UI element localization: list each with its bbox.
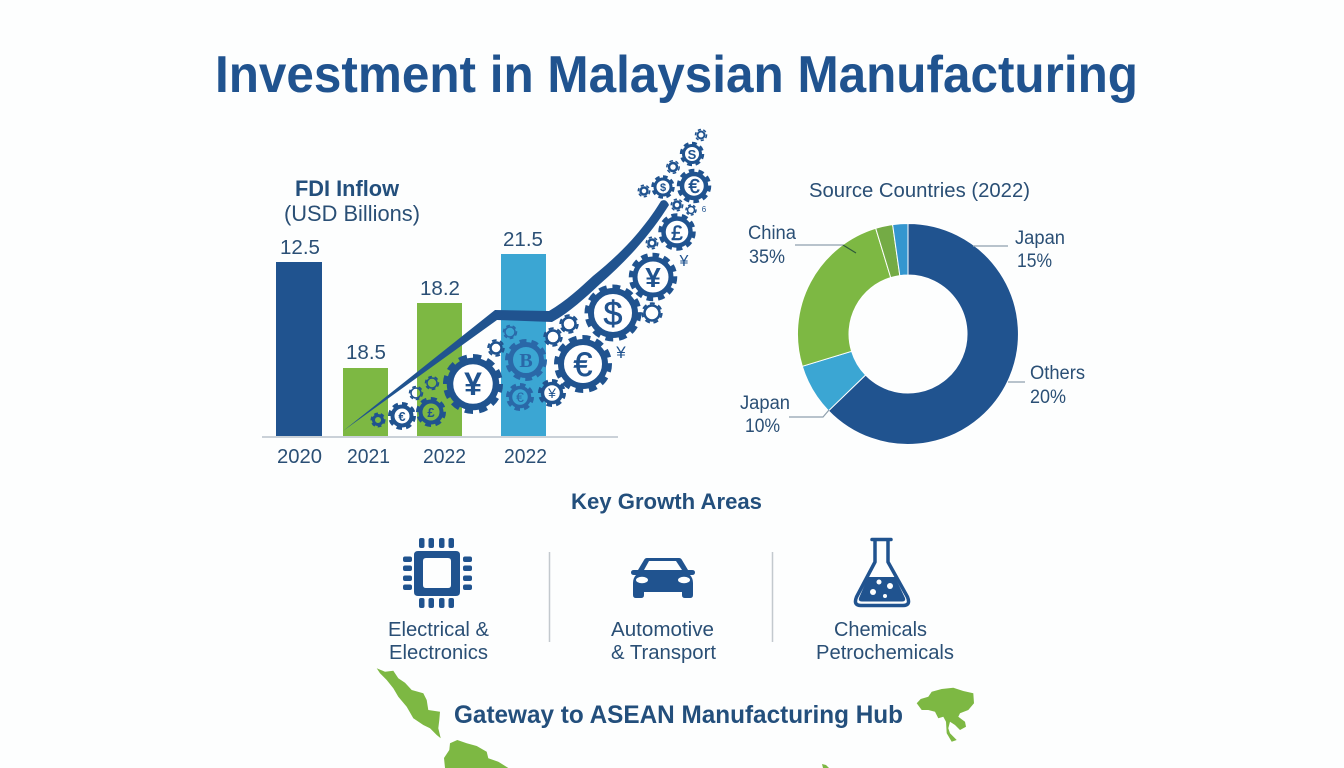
gear: pound upper — [660, 215, 694, 249]
bar values: 18.2 — [420, 278, 460, 300]
map: southern specks — [822, 764, 829, 768]
chart heading: (USD Billions) — [284, 201, 420, 226]
bar values — [280, 229, 543, 364]
gear: B — [507, 341, 545, 379]
chart heading: FDI Inflow — [295, 176, 400, 201]
divider right — [772, 552, 774, 642]
loose yen signs: 6 — [702, 205, 707, 214]
year labels: 2020 — [277, 446, 322, 468]
title: Investment in Malaysian Manufacturing — [215, 46, 1138, 104]
bar values: 21.5 — [503, 229, 543, 251]
donut labels: 20% — [1030, 387, 1066, 408]
label: electrical and electronics — [388, 619, 490, 664]
icon: car — [631, 558, 695, 598]
gear: yen upper — [631, 255, 675, 299]
year labels: 2022 — [423, 446, 466, 468]
gear: yen upper: ¥ — [645, 262, 661, 293]
donut labels: Japan — [1015, 228, 1065, 249]
panel: FDI inflow bar chart — [262, 176, 618, 468]
donut labels: Others — [1030, 363, 1085, 384]
donut heading: Source Countries (2022) — [809, 180, 1030, 202]
map: peninsula — [444, 740, 508, 768]
gear: dollar large: $ — [604, 295, 623, 333]
label: automotive and transport — [611, 619, 716, 664]
gear: dollar large — [587, 287, 639, 339]
gear: euro large — [556, 338, 610, 390]
icon: microchip — [403, 538, 472, 608]
gear: pound upper: £ — [671, 222, 683, 245]
gear: euro upper: € — [688, 176, 700, 198]
panel: source countries donut chart — [740, 180, 1085, 444]
gear: euro small in bar — [508, 384, 532, 410]
donut labels: China — [748, 223, 796, 244]
divider left — [548, 552, 550, 642]
label: chemicals and petrochemicals: Petrochemicals — [816, 642, 954, 664]
label: chemicals and petrochemicals: Chemicals — [834, 619, 927, 641]
year labels — [277, 446, 547, 468]
loose yen signs — [615, 205, 707, 362]
small cogs — [372, 130, 706, 426]
year labels: 2021 — [347, 446, 390, 468]
gear: yen small — [540, 380, 564, 406]
gear: dollar upper — [652, 176, 674, 198]
donut labels: 35% — [749, 247, 785, 268]
bar values: 18.5 — [346, 342, 386, 364]
gear: yen small: ¥ — [547, 385, 556, 401]
leader lines — [789, 245, 1025, 417]
gear: pound — [418, 398, 444, 426]
year labels: 2022 — [504, 446, 547, 468]
growth arrow curve — [343, 200, 669, 431]
loose yen signs: ¥ — [615, 343, 626, 362]
gear: euro low — [390, 404, 414, 428]
panel: key growth areas — [388, 489, 954, 664]
gear: dollar upper: $ — [660, 182, 666, 194]
label: chemicals and petrochemicals — [816, 619, 954, 664]
map of ASEAN region — [377, 668, 974, 768]
gear: euro low: € — [398, 409, 406, 424]
donut labels: 10% — [745, 416, 780, 437]
gear: euro upper — [678, 170, 710, 202]
label: automotive and transport: & Transport — [611, 642, 716, 664]
map: eastern island — [917, 688, 974, 742]
donut labels: 15% — [1017, 251, 1052, 272]
label: automotive and transport: Automotive — [611, 619, 714, 641]
loose yen signs: ¥ — [679, 253, 689, 270]
gear: S top: S — [688, 147, 697, 162]
bar values: 12.5 — [280, 237, 320, 259]
donut labels — [740, 223, 1085, 437]
map: Sumatra — [377, 668, 441, 738]
donut segments — [797, 224, 1018, 444]
gears of currency — [372, 130, 710, 428]
gear: yen large — [446, 356, 500, 412]
donut labels: Japan — [740, 393, 790, 414]
gear: euro large: € — [574, 346, 593, 384]
gear: B: B — [519, 350, 533, 372]
icon: flask — [855, 540, 909, 606]
label: electrical and electronics: Electronics — [389, 642, 488, 664]
section heading: Key Growth Areas — [571, 489, 762, 514]
label: electrical and electronics: Electrical & — [388, 619, 490, 641]
gear: S top — [681, 143, 703, 165]
gear: euro small in bar: € — [516, 389, 524, 405]
bars — [262, 254, 618, 437]
gear: pound: £ — [427, 405, 435, 420]
chart heading — [284, 176, 420, 226]
gear: yen large: ¥ — [464, 366, 482, 402]
map caption: Gateway to ASEAN Manufacturing Hub — [454, 701, 903, 729]
